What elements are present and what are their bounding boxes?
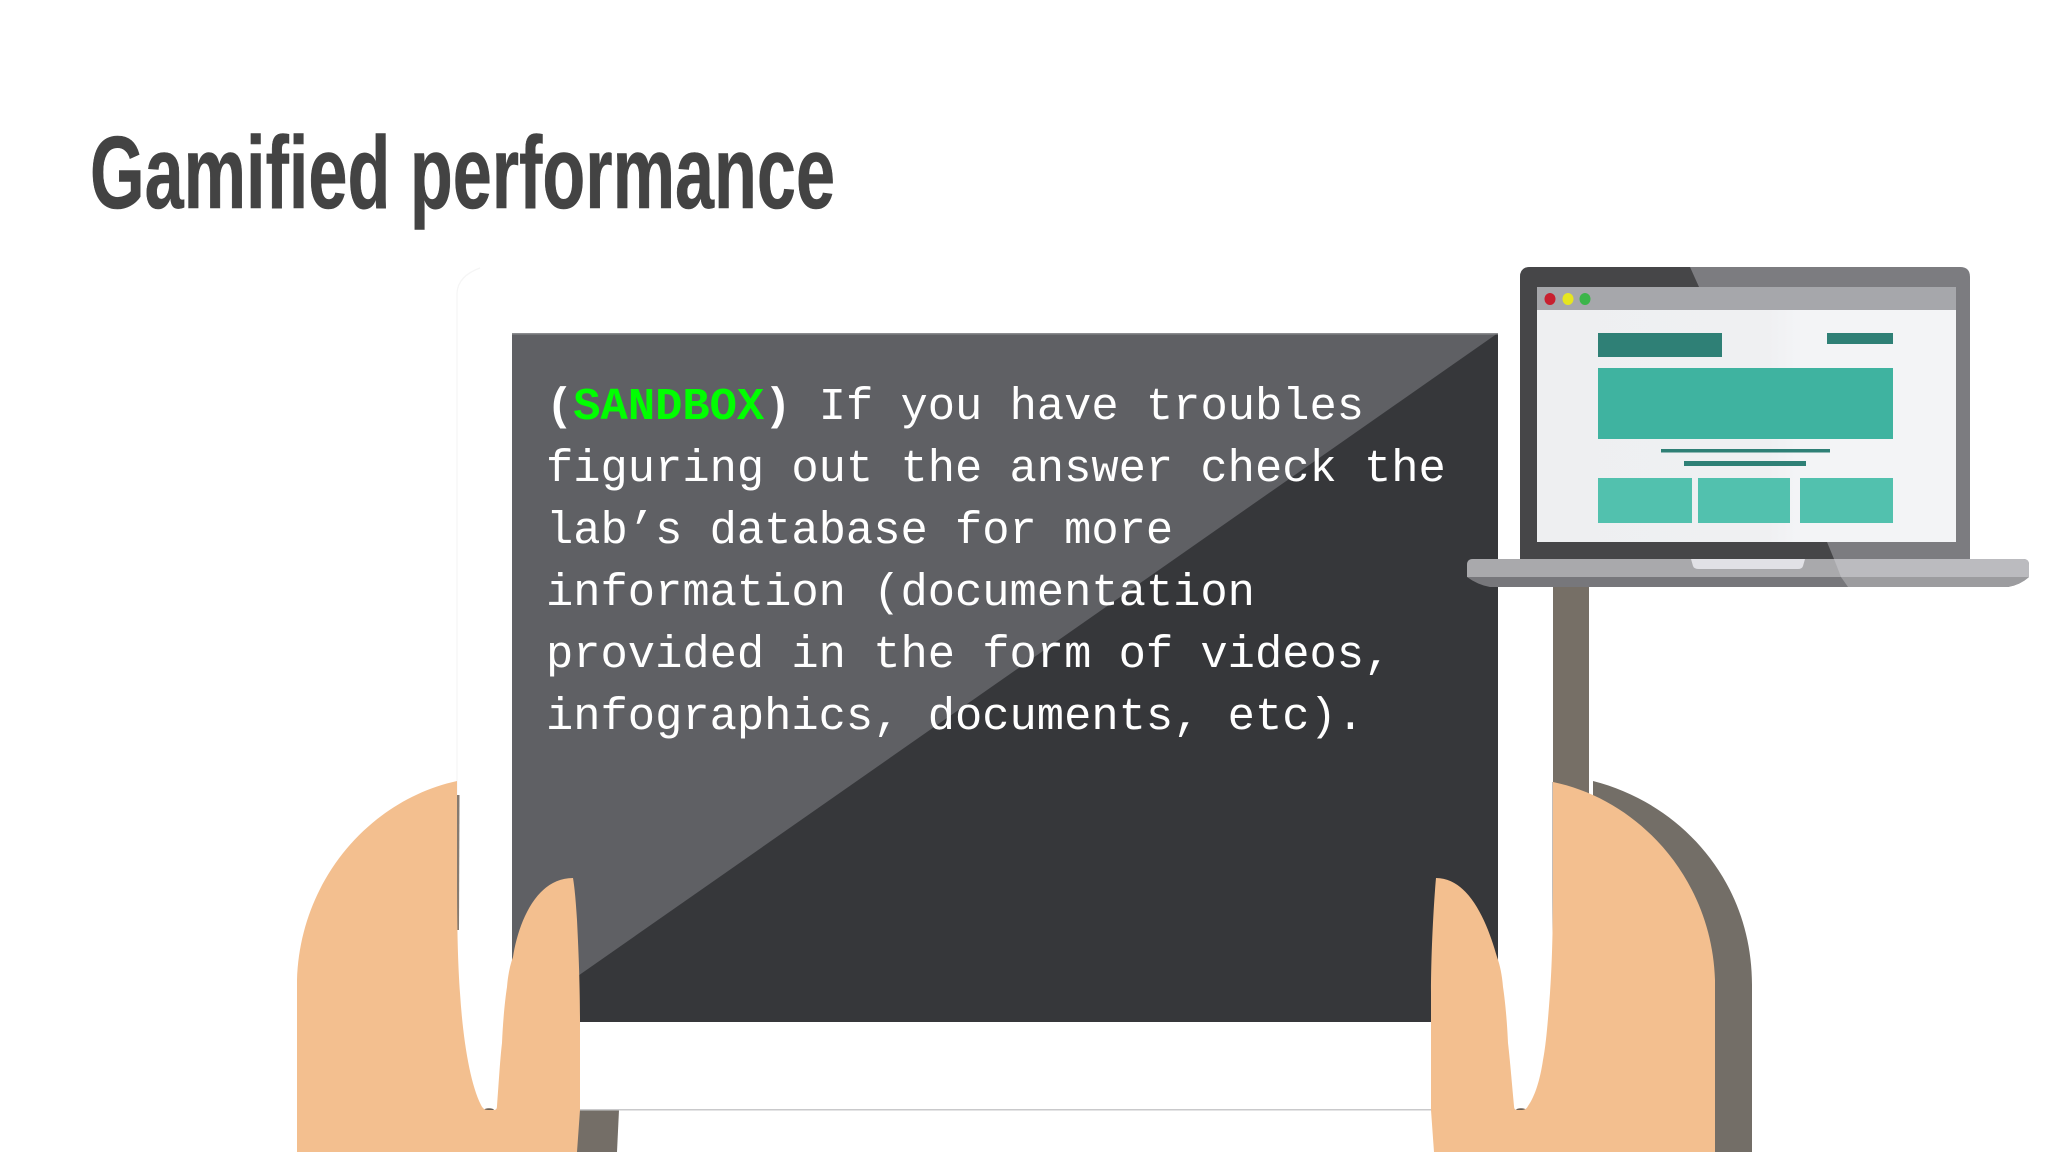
page hero block — [1598, 368, 1893, 439]
page card three — [1800, 478, 1893, 523]
tablet screen text — [546, 381, 1446, 743]
left hand — [297, 781, 580, 1152]
page nav block — [1827, 333, 1893, 344]
page text line two — [1684, 461, 1806, 466]
window dot red — [1544, 293, 1556, 305]
laptop notch — [1691, 559, 1805, 569]
text line 6: infographics, documents, etc). — [546, 691, 1364, 743]
browser title bar — [1537, 287, 1956, 310]
text line 1: (SANDBOX) If you have troubles — [546, 381, 1364, 433]
text line 3: lab’s database for more — [546, 505, 1173, 557]
text line 4: information (documentation — [546, 567, 1255, 619]
page card two — [1698, 478, 1790, 523]
laptop — [1467, 267, 2029, 587]
page text line one — [1661, 449, 1830, 452]
window dot yellow — [1562, 293, 1574, 305]
laptop base — [1467, 559, 2029, 587]
tablet bottom edge — [575, 1109, 1435, 1110]
laptop lid — [1520, 267, 1970, 559]
right hand — [1431, 782, 1715, 1152]
tablet screen — [512, 333, 1498, 1022]
laptop stand shadow — [1553, 580, 1589, 805]
bezel shadow strips — [457, 782, 1554, 952]
tablet bottom shadow — [575, 1110, 619, 1152]
right hand shadow — [1593, 781, 1752, 1152]
browser window — [1537, 287, 1956, 542]
title: Gamified performance — [90, 115, 835, 230]
window dot green — [1580, 293, 1590, 305]
text line 5: provided in the form of videos, — [546, 629, 1391, 681]
page card one — [1598, 478, 1692, 523]
tablet — [457, 268, 1498, 1110]
gap shadow marks — [484, 1108, 1526, 1112]
text line 2: figuring out the answer check the — [546, 443, 1446, 495]
tablet body outline — [457, 268, 480, 1000]
page logo block — [1598, 333, 1722, 357]
